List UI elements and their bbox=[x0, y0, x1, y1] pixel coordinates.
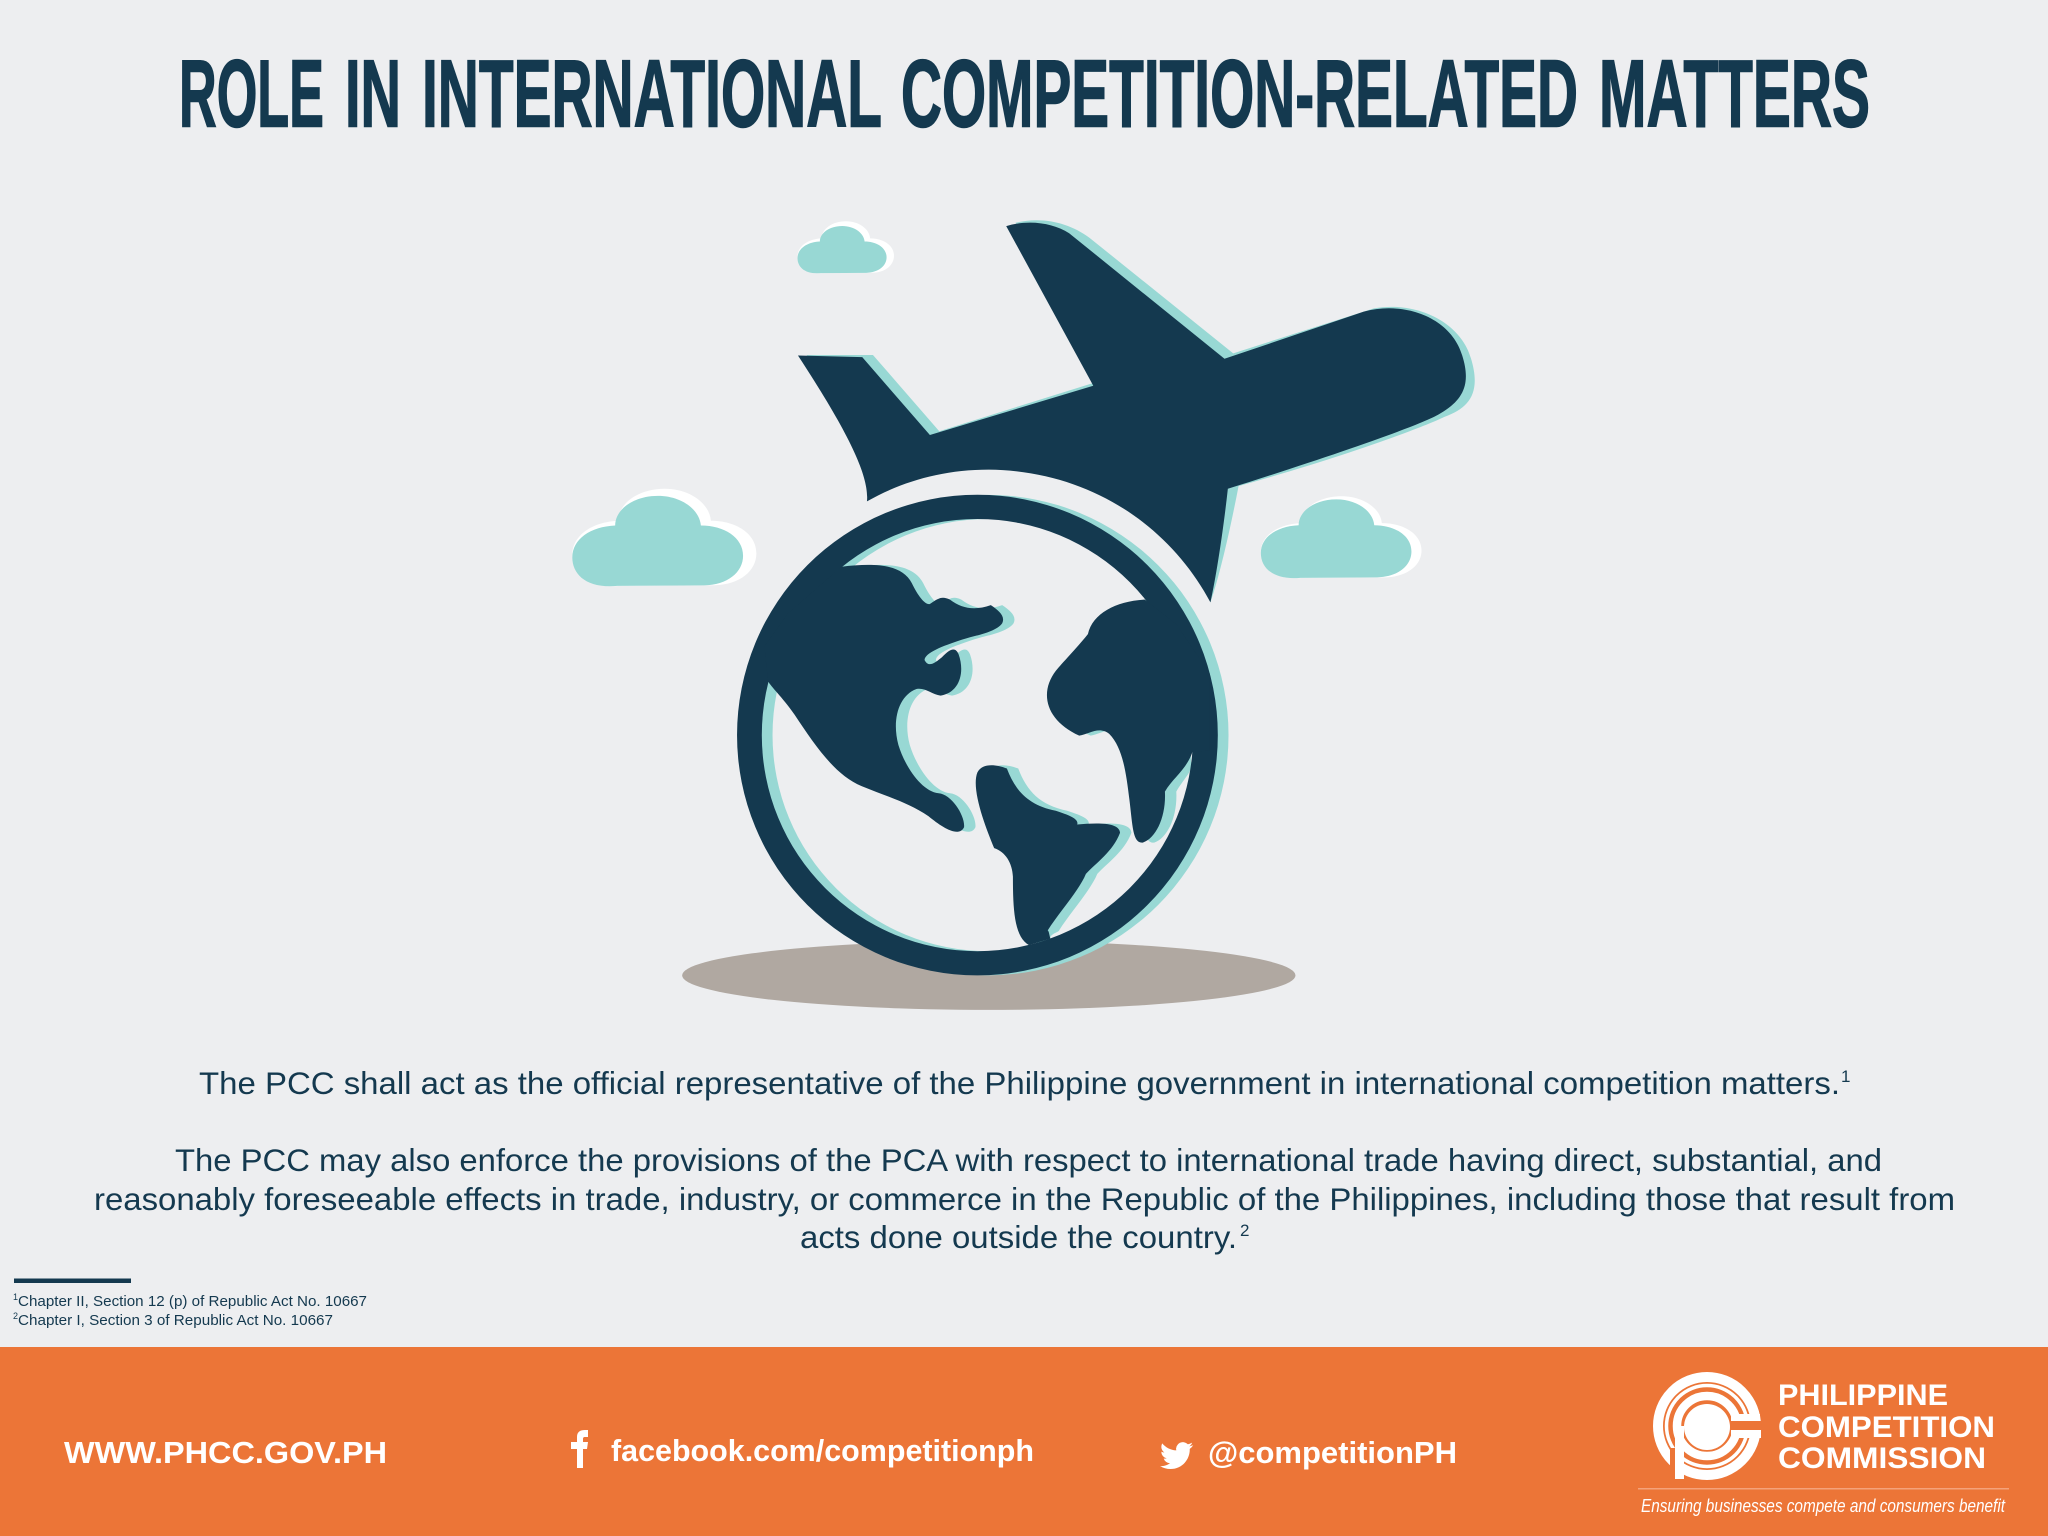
logo wordmark bbox=[1778, 1379, 1995, 1475]
title: IN bbox=[345, 40, 401, 148]
title: MATTERS bbox=[1599, 40, 1870, 148]
footer band bbox=[0, 1347, 2048, 1536]
body text: second paragraph: The PCC may also enforce the provisions of the PCA with respect to international trade having direct, substantial, and bbox=[175, 1142, 1882, 1178]
icon: twitter bird bbox=[1160, 1442, 1193, 1469]
icon: airplane bbox=[798, 220, 1475, 602]
body text: second paragraph: reasonably foreseeable effects in trade, industry, or commerce in the Republic of the Philippines, including those that result from bbox=[94, 1181, 1955, 1217]
footnote rule bbox=[14, 1278, 131, 1283]
title: INTERNATIONAL bbox=[422, 40, 882, 148]
footnotes bbox=[13, 1292, 367, 1329]
facebook link with icon: facebook.com/competitionph bbox=[611, 1433, 1034, 1468]
body text: second paragraph: acts done outside the country. bbox=[800, 1219, 1237, 1255]
ground shadow bbox=[682, 941, 1295, 1010]
footnotes: Chapter II, Section 12 (p) of Republic Act No. 10667 bbox=[18, 1293, 367, 1310]
icon: globe bbox=[737, 495, 1229, 975]
body text: first paragraph: 1 bbox=[1841, 1067, 1850, 1086]
body text: second paragraph: 2 bbox=[1240, 1221, 1249, 1240]
logo: Philippine Competition Commission bbox=[1638, 1377, 2009, 1516]
body text: second paragraph bbox=[94, 1142, 1955, 1255]
globe ring bbox=[737, 495, 1218, 975]
icon: small cloud bbox=[798, 221, 894, 273]
logo mark bbox=[1658, 1377, 1765, 1482]
footnotes: 2 bbox=[13, 1311, 18, 1321]
illustration: plane, globe and clouds bbox=[572, 220, 1475, 1010]
logo wordmark: COMPETITION bbox=[1778, 1411, 1995, 1444]
icon: facebook bbox=[571, 1430, 588, 1468]
land: lower continent bbox=[976, 765, 1120, 945]
body text: first paragraph: The PCC shall act as the official representative of the Philippine government in international competition matters. bbox=[199, 1065, 1840, 1101]
website link: WWW.PHCC.GOV.PH bbox=[64, 1435, 387, 1470]
footnotes: Chapter I, Section 3 of Republic Act No. 10667 bbox=[18, 1312, 333, 1329]
icon: right cloud bbox=[1261, 496, 1422, 578]
title: ROLE bbox=[179, 40, 324, 148]
teal land shadow bbox=[776, 565, 1192, 945]
logo wordmark: PHILIPPINE bbox=[1778, 1379, 1948, 1412]
icon: left cloud bbox=[572, 489, 756, 586]
title bbox=[179, 40, 1870, 148]
land: right continent bbox=[1047, 600, 1210, 843]
title: COMPETITION-RELATED bbox=[901, 40, 1578, 148]
land: left continent bbox=[764, 565, 1003, 832]
globe teal offset and interior bbox=[748, 495, 1229, 975]
footnotes: 1 bbox=[13, 1292, 18, 1302]
logo wordmark: COMMISSION bbox=[1778, 1442, 1986, 1475]
twitter handle with icon: @competitionPH bbox=[1208, 1435, 1457, 1470]
